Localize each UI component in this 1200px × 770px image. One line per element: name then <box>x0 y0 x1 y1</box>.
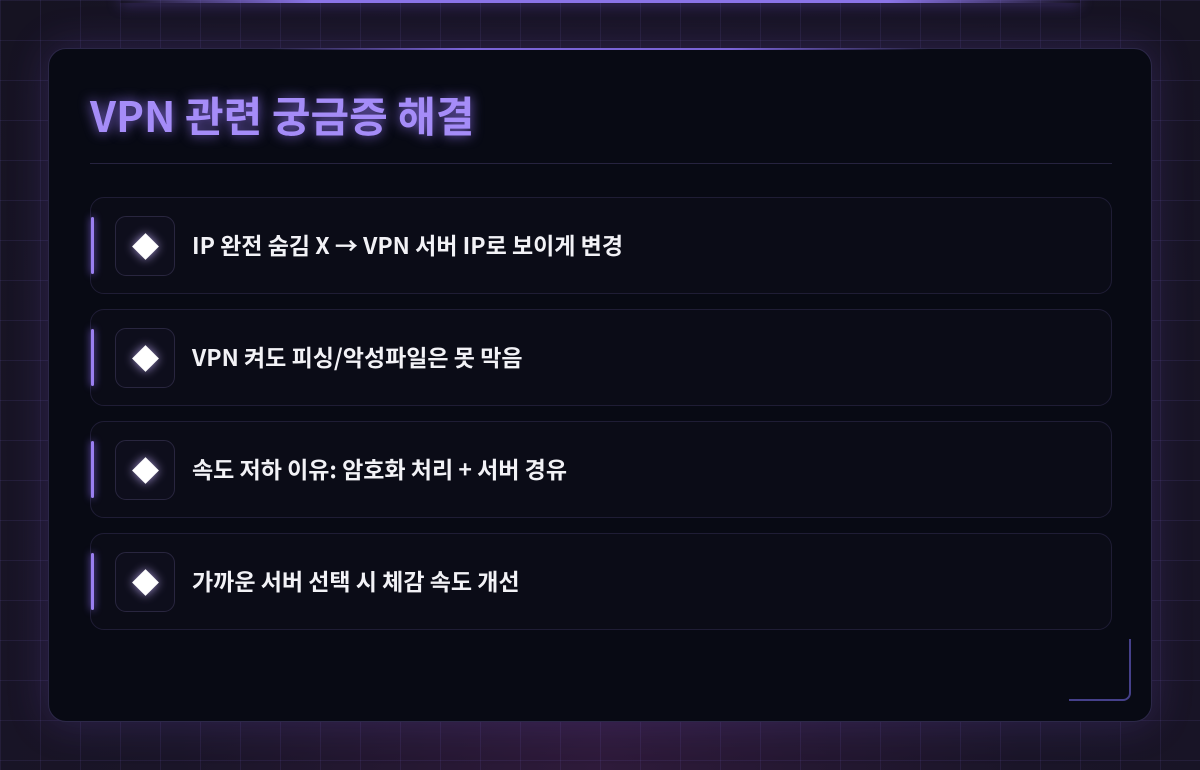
icon: diamond <box>115 552 175 612</box>
text 4: 가까운 서버 선택 시 체감 속도 개선 <box>192 563 520 597</box>
item 4 <box>90 533 1112 630</box>
item 3 <box>90 421 1112 518</box>
item 2 <box>90 309 1112 406</box>
icon: diamond <box>115 328 175 388</box>
title: VPN 관련 궁금증 해결 <box>90 84 475 145</box>
item 1 <box>90 197 1112 294</box>
text 1: IP 완전 숨김 X → VPN 서버 IP로 보이게 변경 <box>192 227 623 261</box>
corner bracket <box>1069 639 1131 701</box>
icon: diamond <box>115 216 175 276</box>
icon: diamond <box>115 440 175 500</box>
text 3: 속도 저하 이유: 암호화 처리 + 서버 경유 <box>192 451 567 485</box>
text 2: VPN 켜도 피싱/악성파일은 못 막음 <box>192 339 523 373</box>
